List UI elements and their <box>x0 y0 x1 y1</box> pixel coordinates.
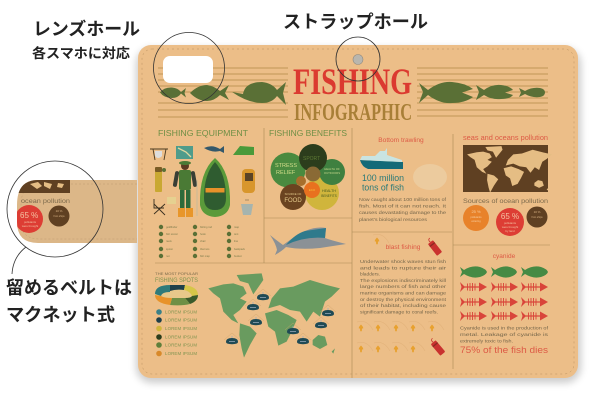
belt red circle: pollutants <box>24 220 37 224</box>
bubble chart: SPORT <box>303 156 320 162</box>
paragraph <box>360 259 447 316</box>
paragraph: Now caught about 100 million tons of <box>359 197 447 203</box>
stat: 75 percent: 75% of the fish dies <box>460 345 548 356</box>
paragraph <box>460 326 549 344</box>
icon: dynamite <box>426 237 442 256</box>
equipment list: chair <box>200 239 206 243</box>
subheading: sources: Sources of ocean pollution <box>463 198 548 205</box>
icon: bucket <box>241 200 253 215</box>
panel: cyanide <box>460 253 549 356</box>
equipment list: tent <box>234 232 239 236</box>
heading: fishing spots <box>155 271 198 284</box>
circle: brown: 10 % <box>534 210 541 214</box>
heading: blast fishing: blast fishing <box>386 244 421 251</box>
panel: bottom trawling <box>359 137 447 223</box>
panel: fishing benefits <box>269 129 348 255</box>
heading: fishing equipment: FISHING EQUIPMENT <box>158 128 248 138</box>
header lines right <box>417 68 548 116</box>
belt red circle: were brought <box>22 224 38 228</box>
panel: blast fishing <box>357 234 447 356</box>
paragraph: planet's biological resources <box>359 217 428 223</box>
heading: cyanide: cyanide <box>493 253 516 260</box>
bubble chart: STRESS <box>275 163 297 169</box>
paragraph <box>359 197 447 223</box>
icon: campfire pot <box>150 149 168 160</box>
subheading: compatible with each smartphone: 各スマホに対応 <box>32 42 130 62</box>
header lines left <box>158 68 288 117</box>
icon: tent <box>233 146 254 155</box>
callout circle: belt <box>7 161 103 257</box>
heading: fishing spots: FISHING SPOTS <box>155 278 198 284</box>
paragraph: fish. Most of it can not reach. It <box>359 204 447 210</box>
equipment list: net <box>166 254 170 258</box>
paragraph: significant damage to coral reefs. <box>360 310 438 316</box>
header fish left <box>160 82 286 105</box>
paragraph: or destroy the physical environment <box>360 297 447 303</box>
icon: thermos <box>155 167 166 192</box>
equipment list: line <box>234 239 239 243</box>
icons: healthy fish row <box>460 266 548 278</box>
panel: seas and oceans pollution <box>463 135 552 236</box>
heading: seas and oceans pollution: seas and oceans pollution <box>463 135 548 142</box>
stat: 100 million tons: tons of fish <box>362 182 404 194</box>
icon: flame <box>373 234 389 244</box>
circle: red 65 percent <box>496 208 524 236</box>
icon: fish <box>204 146 224 153</box>
legend: LOREM IPSUM <box>165 318 197 322</box>
bubble chart: SOURCE OF <box>285 192 302 196</box>
paragraph: extremely toxic to fish. <box>460 338 513 344</box>
legend <box>156 309 197 356</box>
icons: fish skeletons <box>460 282 548 321</box>
title <box>293 62 412 126</box>
paragraph: Cyanide is used in the production of <box>460 326 549 332</box>
icon: folding chair <box>154 199 165 215</box>
bubble chart: HEALTH OF <box>324 167 340 171</box>
circle: red 65 percent: by land <box>505 229 515 233</box>
equipment list: reels <box>166 239 172 243</box>
circle: orange: entering <box>471 219 481 223</box>
heading: fishing spots: THE MOST POPULAR <box>155 271 198 276</box>
circle: orange: pollutants <box>470 215 482 219</box>
paragraph: metal. Leakage of cyanide is <box>460 332 549 338</box>
equipment list: spoon <box>166 248 174 251</box>
bubble chart: OUTDOORS <box>324 171 340 175</box>
heading: fishing benefits: FISHING BENEFITS <box>269 129 348 138</box>
bubble chart: HEALTH <box>322 189 336 193</box>
ring chart <box>155 285 198 305</box>
case shadow <box>136 48 581 383</box>
paragraph: and leads to rupture their air <box>360 266 447 272</box>
bubble chart: BENEFITS <box>321 194 337 198</box>
paragraph: Underwater shock waves stun fish <box>360 259 446 265</box>
paragraph: marine organisms and can damage <box>360 290 446 296</box>
equipment list <box>159 225 246 258</box>
icon: dynamite small <box>428 338 445 356</box>
circle: brown <box>526 206 548 228</box>
circle: orange <box>463 205 489 231</box>
icon: net <box>413 164 447 190</box>
paragraph: causes devastating damage to the <box>359 210 446 216</box>
callout circle: lens <box>154 32 224 104</box>
equipment list: bucket <box>234 254 242 258</box>
belt text: ocean pollution <box>21 198 70 205</box>
header fish right <box>419 82 545 103</box>
circle: orange: 25 % <box>471 209 481 214</box>
label: magnetic closure belt: 留めるベルトは <box>6 274 132 300</box>
circle: red 65 percent: pollutants <box>504 221 517 225</box>
circle: red 65 percent: were brought <box>502 225 518 229</box>
bubble chart: FOOD <box>284 198 302 204</box>
label: magnetic closure belt: マクネット式 <box>6 301 115 327</box>
belt red circle <box>15 205 43 233</box>
icon: map <box>176 146 193 159</box>
equipment list: fish scorer <box>166 232 178 236</box>
legend: LOREM IPSUM <box>165 334 197 340</box>
legend: LOREM IPSUM <box>165 326 197 331</box>
lens hole <box>163 56 213 83</box>
stat: 100 million tons: 100 million <box>362 173 404 184</box>
icon: tackle box <box>167 197 176 204</box>
title: INFOGRAPHIC <box>294 100 412 126</box>
belt brown circle <box>48 206 70 226</box>
leader line: belt <box>12 247 26 274</box>
paragraph: bladders. <box>360 272 380 278</box>
icon: backpack <box>242 169 255 193</box>
icon: inflatable boat <box>200 158 230 217</box>
legend: LOREM IPSUM <box>165 351 197 356</box>
heading: strap hole: ストラップホール <box>283 8 428 34</box>
icon: marlin <box>270 228 346 255</box>
world map green <box>208 273 340 358</box>
stat: 100 million tons <box>362 173 404 194</box>
legend: LOREM IPSUM <box>165 310 197 314</box>
circle: red 65 percent: 65 % <box>501 212 519 221</box>
belt brown circle: from ships <box>53 215 65 218</box>
explosion icons <box>357 321 444 352</box>
equipment list: map <box>234 226 240 229</box>
callout circle: strap <box>336 37 380 81</box>
heading: lens hole: レンズホール <box>33 15 140 41</box>
icon: trawler <box>360 148 403 169</box>
phone case panel <box>138 45 578 378</box>
equipment list: thermos <box>200 247 210 251</box>
bubble chart: RELIEF <box>276 170 296 176</box>
equipment list: goldfinder <box>166 225 178 229</box>
equipment list: hook <box>200 232 206 236</box>
title: FISHING <box>293 62 412 103</box>
equipment list: backpack <box>234 247 246 251</box>
icon: fisherman <box>173 161 197 217</box>
paragraph: The explosions indiscriminately kill <box>360 278 446 284</box>
belt brown circle: 10 % <box>56 209 63 213</box>
world map brown <box>463 145 552 193</box>
strap hole <box>353 54 363 64</box>
legend: LOREM IPSUM <box>165 342 197 348</box>
bubble chart <box>270 144 345 210</box>
paragraph: of their habitat, including cause <box>360 303 446 309</box>
panel: most popular fishing spots <box>155 271 340 358</box>
circle: brown: from ships <box>531 216 543 219</box>
belt red circle: 65 % <box>20 211 38 220</box>
bubble chart: ECO <box>309 188 316 192</box>
equipment list: fish map <box>200 254 210 258</box>
closure belt <box>15 180 137 243</box>
equipment list: fishing rod <box>200 225 213 229</box>
panel: fishing equipment <box>150 128 255 258</box>
section dividers <box>155 128 550 378</box>
paragraph: large numbers of fish and other <box>360 284 446 290</box>
belt map fragment <box>17 180 70 193</box>
heading: bottom trawling: Bottom trawling <box>378 137 424 144</box>
label: magnetic closure belt <box>6 274 132 327</box>
